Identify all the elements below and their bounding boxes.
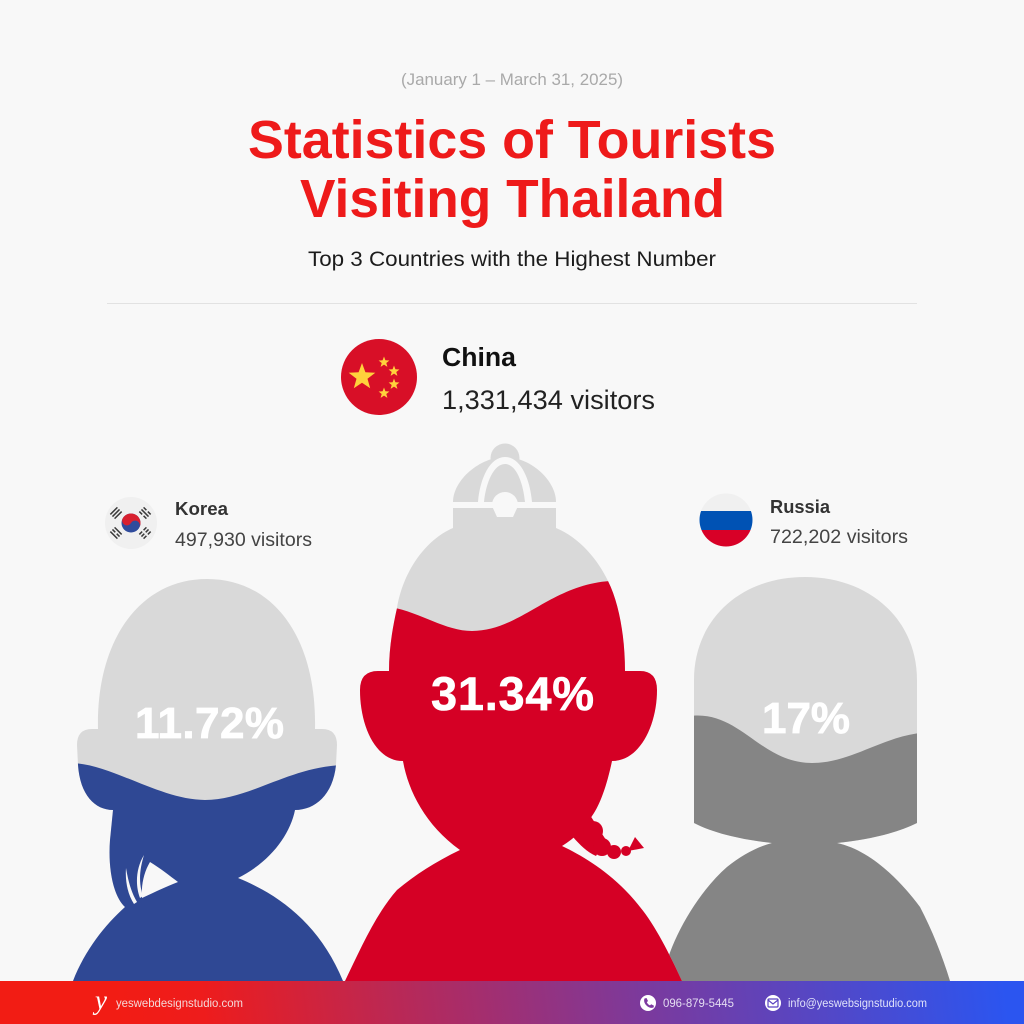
value: 17%: 17%	[762, 694, 850, 743]
website: yeswebdesignstudio.com	[116, 998, 243, 1010]
cap	[453, 444, 556, 518]
value: 31.34%: 31.34%	[431, 667, 594, 720]
email address: info@yeswebsignstudio.com	[788, 998, 927, 1010]
value: 11.72%: 11.72%	[135, 699, 284, 748]
label: Russia: 722,202 visitors	[770, 527, 908, 548]
figure: Russia 17%	[669, 577, 950, 981]
title: Statistics of Tourists	[248, 110, 776, 170]
label: Russia	[770, 496, 908, 548]
title: Visiting Thailand	[300, 169, 725, 229]
figure: China 31.34%	[340, 444, 690, 990]
icon: phone	[640, 995, 656, 1011]
title	[248, 110, 776, 229]
icon: Russia flag	[700, 511, 752, 546]
logo: y	[92, 985, 107, 1015]
phone number: 096-879-5445	[663, 998, 734, 1010]
subtitle: Top 3 Countries with the Highest Number	[308, 247, 716, 271]
label: Russia: Russia	[770, 496, 831, 517]
label: China	[442, 344, 655, 415]
figure: Korea 11.72%	[70, 570, 350, 990]
label: China: China	[442, 344, 517, 372]
footer bar	[0, 981, 1024, 1024]
braid	[573, 812, 644, 859]
label: Korea: Korea	[175, 498, 229, 519]
label: China: 1,331,434 visitors	[442, 385, 655, 415]
icon: China flag	[341, 339, 417, 415]
label: Korea	[175, 498, 312, 551]
date range: (January 1 – March 31, 2025)	[401, 71, 623, 89]
icon: Korea flag	[105, 497, 157, 549]
label: Korea: 497,930 visitors	[175, 530, 312, 551]
icon: email	[765, 995, 781, 1011]
